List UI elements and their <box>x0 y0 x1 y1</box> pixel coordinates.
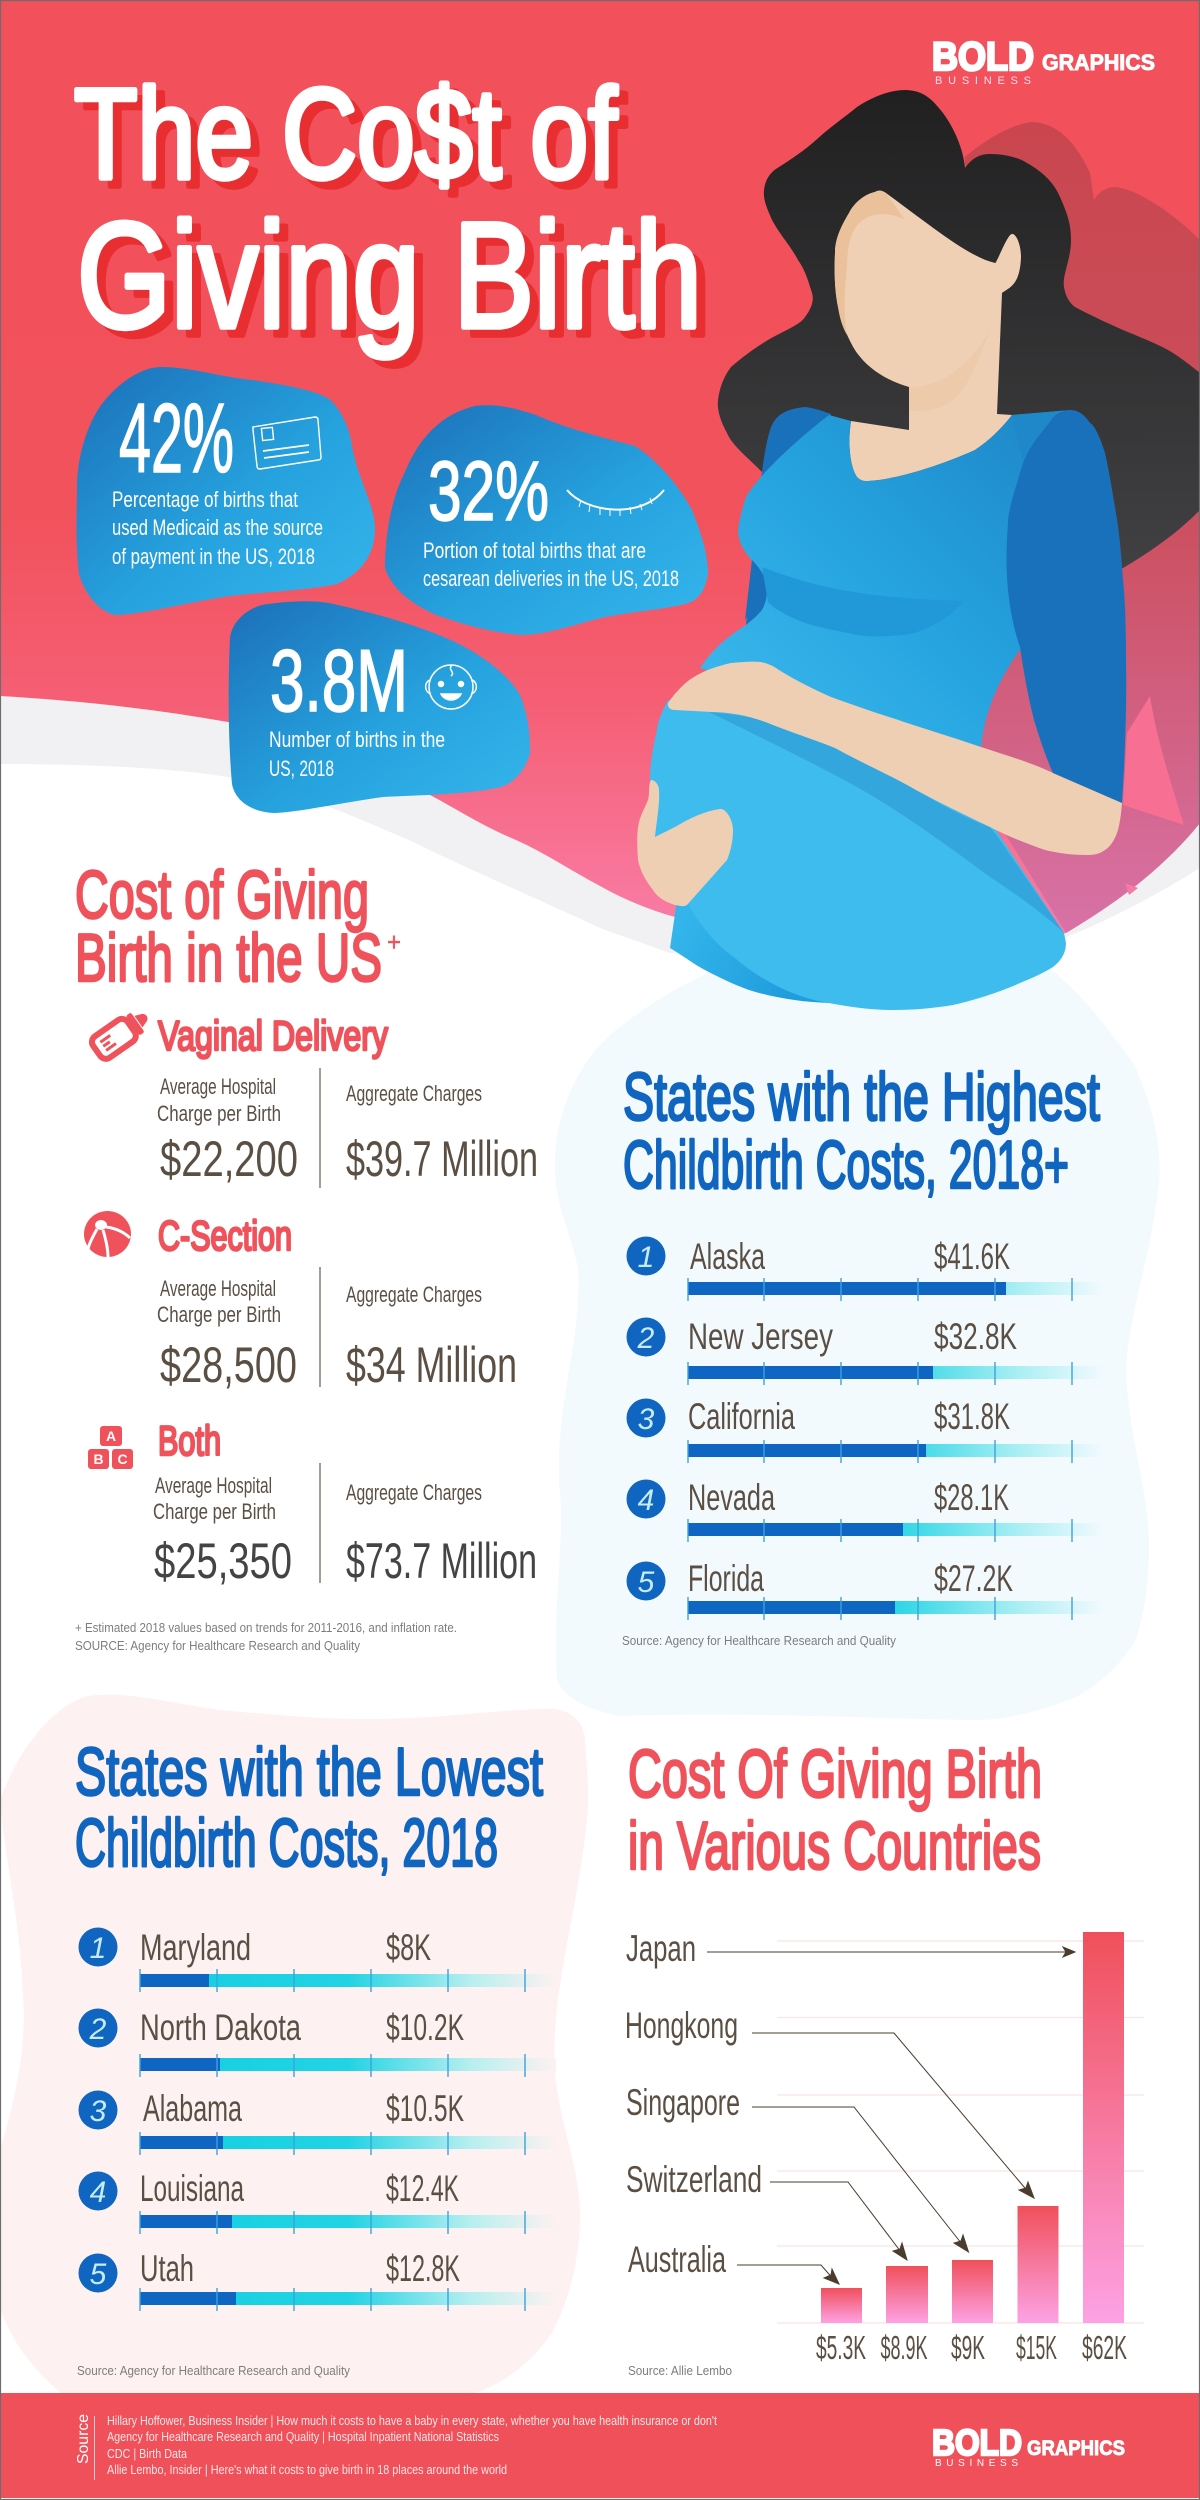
footer references: Allie Lembo, Insider | Here's what it costs to give birth in 18 places around the world <box>107 2463 507 2477</box>
row: Nevada: $28.1K <box>934 1477 1009 1518</box>
row: New Jersey: $32.8K <box>934 1316 1017 1357</box>
arrow: Japan <box>707 1947 1075 1957</box>
footer divider <box>94 2416 96 2480</box>
logo: Bold Business Graphics top: GRAPHICS <box>1042 50 1155 75</box>
figure: 32% <box>428 444 549 538</box>
country label: Singapore: Singapore <box>626 2082 740 2123</box>
title text: Giving Birth <box>77 191 702 359</box>
section: vaginal delivery <box>89 1005 538 1188</box>
row: Maryland: Maryland <box>140 1927 251 1968</box>
heading: states with the lowest childbirth costs: States with the Lowest <box>75 1734 543 1810</box>
source: highest states: Source: Agency for Healthcare Research and Quality <box>622 1634 897 1648</box>
chart: lowest states bars <box>78 1927 556 2311</box>
row: California: 3 <box>638 1403 655 1436</box>
description: US, 2018 <box>269 756 334 781</box>
panel: states with the lowest costs background <box>0 1695 588 2393</box>
footer band <box>0 2393 1200 2498</box>
blob <box>76 367 375 615</box>
label: Both <box>158 1417 221 1464</box>
row: Alaska: 1 <box>638 1241 654 1274</box>
divider <box>319 1267 321 1387</box>
title shadow: The Co$t of <box>83 71 626 214</box>
title text: The Co$t of <box>74 63 617 206</box>
description <box>423 538 679 591</box>
row: Alabama <box>78 2088 556 2155</box>
arrow: Australia <box>737 2265 839 2284</box>
row: Alaska: $41.6K <box>934 1236 1010 1277</box>
small pink wedge <box>1125 883 1138 895</box>
country label: Hongkong: Hongkong <box>625 2005 738 2046</box>
hero background: grey wave <box>0 690 1200 953</box>
row: Maryland: $8K <box>386 1927 431 1968</box>
arrow: Switzerland <box>770 2182 907 2260</box>
row: Alaska <box>626 1236 1104 1301</box>
aggregate value: $39.7 Million <box>346 1131 538 1187</box>
logo: Bold Business Graphics top: BUSINESS <box>935 75 1031 87</box>
bar: Singapore <box>952 2260 993 2323</box>
row: Utah: Utah <box>140 2248 194 2289</box>
value labels: $9K <box>951 2329 985 2366</box>
row: Maryland: 1 <box>90 1932 106 1965</box>
figure: 3.8M <box>270 631 408 730</box>
average charge label <box>153 1473 276 1524</box>
arrow: Singapore <box>752 2107 968 2252</box>
average value: $28,500 <box>160 1337 297 1393</box>
row: Utah: 5 <box>90 2258 107 2291</box>
icon: abc blocks <box>88 1426 133 1469</box>
panel: states with the highest costs background <box>555 968 1160 1720</box>
blob <box>385 405 708 635</box>
title <box>74 63 711 367</box>
title text <box>74 63 702 359</box>
average value: $22,200 <box>160 1131 298 1187</box>
row: Utah: $12.8K <box>386 2248 460 2289</box>
hero background: red gradient <box>0 0 1200 948</box>
description: used Medicaid as the source <box>112 515 323 540</box>
title shadow: Giving Birth <box>86 199 711 367</box>
stat card: 3.8M births <box>229 601 530 813</box>
pink wedge <box>1123 696 1184 825</box>
average charge label: Average Hospital <box>160 1276 276 1301</box>
figure: 42% <box>119 383 234 493</box>
average charge label: Average Hospital <box>160 1074 276 1099</box>
heading: cost of giving birth in various countries <box>628 1736 1042 1884</box>
description: Percentage of births that <box>112 487 298 512</box>
value labels <box>816 2329 1127 2366</box>
back shape behind woman <box>960 122 1200 933</box>
blob <box>229 601 530 813</box>
label: Vaginal Delivery <box>158 1012 388 1059</box>
row: Alabama: 3 <box>90 2095 107 2128</box>
aggregate value: $73.7 Million <box>346 1533 537 1589</box>
stat card: 32% cesarean <box>385 405 708 635</box>
bar: Switzerland <box>886 2266 928 2323</box>
face shading <box>835 191 905 335</box>
description <box>112 487 323 569</box>
description <box>269 727 445 781</box>
footnote and source: + Estimated 2018 values based on trends for 2011-2016, and inflation rate. <box>75 1621 457 1635</box>
value labels: $8.9K <box>880 2329 928 2366</box>
row: New Jersey: 2 <box>637 1322 655 1355</box>
face, neck and chest <box>835 191 1021 481</box>
source: lowest states: Source: Agency for Healthcare Research and Quality <box>77 2364 351 2378</box>
row: North Dakota: 2 <box>89 2013 107 2046</box>
icon: insurance card <box>253 417 321 469</box>
description: of payment in the US, 2018 <box>112 544 315 569</box>
value labels: $5.3K <box>816 2329 866 2366</box>
row: California: California <box>688 1396 795 1437</box>
icon: abc blocks: B <box>93 1451 104 1467</box>
row: Nevada <box>626 1477 1104 1542</box>
section: c-section <box>84 1211 517 1393</box>
logo: Bold Business Graphics top <box>932 35 1155 87</box>
dress: torso <box>700 410 1071 747</box>
chart: highest states bars <box>626 1236 1104 1620</box>
heading: states with the lowest childbirth costs: Childbirth Costs, 2018 <box>75 1805 498 1881</box>
hand <box>637 780 733 906</box>
description: Portion of total births that are <box>423 538 646 563</box>
row: New Jersey <box>626 1316 1104 1385</box>
heading: cost of giving birth in the US: + <box>387 927 401 957</box>
icon: baby face <box>426 665 476 709</box>
row: California <box>626 1396 1104 1463</box>
row: New Jersey: New Jersey <box>688 1316 833 1357</box>
divider <box>319 1068 321 1188</box>
footnote and source <box>75 1621 457 1653</box>
country label: Switzerland: Switzerland <box>626 2159 762 2200</box>
row: Utah <box>78 2248 556 2311</box>
logo: Bold Business Graphics bottom: BUSINESS <box>935 2458 1018 2469</box>
country label: Japan: Japan <box>626 1928 696 1969</box>
bar chart: countries <box>625 1928 1144 2366</box>
dress: dark side under bust <box>746 560 767 625</box>
dress: waist fold <box>762 567 964 636</box>
row: California: $31.8K <box>934 1396 1010 1437</box>
icon: abc blocks: A <box>106 1428 116 1444</box>
row: Alabama: Alabama <box>143 2088 242 2129</box>
logo: Bold Business Graphics bottom: GRAPHICS <box>1027 2437 1125 2460</box>
average value: $25,350 <box>154 1533 292 1589</box>
upper sleeve light edge <box>1012 410 1071 463</box>
footer references <box>107 2414 717 2477</box>
logo: Bold Business Graphics top: BOLD <box>932 35 1034 79</box>
icon: baby bottle <box>89 1005 154 1062</box>
icon: abc blocks: C <box>117 1451 128 1467</box>
average charge label <box>157 1074 281 1126</box>
aggregate value: $34 Million <box>346 1337 517 1393</box>
row: Nevada: Nevada <box>688 1477 775 1518</box>
average charge label: Charge per Birth <box>153 1499 276 1524</box>
row: North Dakota: North Dakota <box>140 2007 301 2048</box>
bar: Hongkong <box>1018 2206 1058 2323</box>
aggregate label: Aggregate Charges <box>346 1081 482 1106</box>
row: Florida <box>626 1558 1104 1620</box>
row: North Dakota: $10.2K <box>386 2007 464 2048</box>
dress: belly <box>650 690 1066 1010</box>
row: Alabama: $10.5K <box>386 2088 464 2129</box>
dress: belly shadow <box>709 712 1064 933</box>
icon: c-section scar <box>567 490 664 516</box>
aggregate label: Aggregate Charges <box>346 1480 482 1505</box>
logo: Bold Business Graphics bottom <box>932 2422 1125 2469</box>
row: Florida: Florida <box>688 1558 764 1599</box>
row: Louisiana <box>78 2168 556 2234</box>
footer references: Agency for Healthcare Research and Quality | Hospital Inpatient National Statistics <box>107 2430 499 2444</box>
row: Louisiana: $12.4K <box>386 2168 459 2209</box>
bar: Japan <box>1083 1932 1124 2323</box>
dress: skirt back <box>670 890 829 1003</box>
footer source label: Source <box>75 2414 92 2464</box>
bar: Australia <box>821 2288 862 2323</box>
row: Maryland <box>78 1927 556 1992</box>
footnote and source: SOURCE: Agency for Healthcare Research and Quality <box>75 1639 361 1653</box>
description: Number of births in the <box>269 727 445 752</box>
average charge label: Charge per Birth <box>157 1302 281 1327</box>
title shadow <box>83 71 711 367</box>
row: Louisiana: 4 <box>90 2176 106 2209</box>
description: cesarean deliveries in the US, 2018 <box>423 566 679 591</box>
average charge label: Charge per Birth <box>157 1101 281 1126</box>
average charge label <box>157 1276 281 1327</box>
source: countries: Source: Allie Lembo <box>628 2364 732 2378</box>
hair <box>718 90 1200 568</box>
heading: cost of giving birth in the US <box>75 857 401 996</box>
illustration: pregnant woman <box>637 90 1200 1010</box>
label: C-Section <box>158 1212 292 1259</box>
section: both <box>88 1417 537 1589</box>
footer references: Hillary Hoffower, Business Insider | How much it costs to have a baby in every state, whether you have health insurance or don't <box>107 2414 717 2428</box>
dress: left shoulder <box>745 407 831 620</box>
icon: beach ball <box>84 1211 131 1257</box>
heading: cost of giving birth in the US: Cost of Giving <box>75 857 369 933</box>
row: Nevada: 4 <box>638 1484 654 1517</box>
country label: Australia: Australia <box>628 2239 726 2280</box>
neck shading <box>909 330 990 411</box>
average charge label: Average Hospital <box>155 1473 272 1498</box>
arm <box>668 662 1122 855</box>
row: Florida: 5 <box>638 1566 655 1599</box>
sleeve <box>1006 410 1126 803</box>
row: Alaska: Alaska <box>690 1236 765 1277</box>
heading: states with the lowest childbirth costs <box>75 1734 543 1881</box>
heading: cost of giving birth in the US: Birth in the US <box>75 920 382 996</box>
stat card: 42% medicaid <box>76 367 375 615</box>
divider <box>319 1463 321 1583</box>
logo: Bold Business Graphics bottom: BOLD <box>932 2422 1022 2463</box>
heading: states with the highest childbirth costs <box>623 1059 1100 1203</box>
footer references: CDC | Birth Data <box>107 2447 187 2461</box>
arrow: Hongkong <box>752 2033 1034 2198</box>
aggregate label: Aggregate Charges <box>346 1282 482 1307</box>
row: Louisiana: Louisiana <box>140 2168 244 2209</box>
row: Florida: $27.2K <box>934 1558 1013 1599</box>
value labels: $15K <box>1016 2329 1057 2366</box>
row: North Dakota <box>78 2007 556 2077</box>
value labels: $62K <box>1082 2329 1127 2366</box>
